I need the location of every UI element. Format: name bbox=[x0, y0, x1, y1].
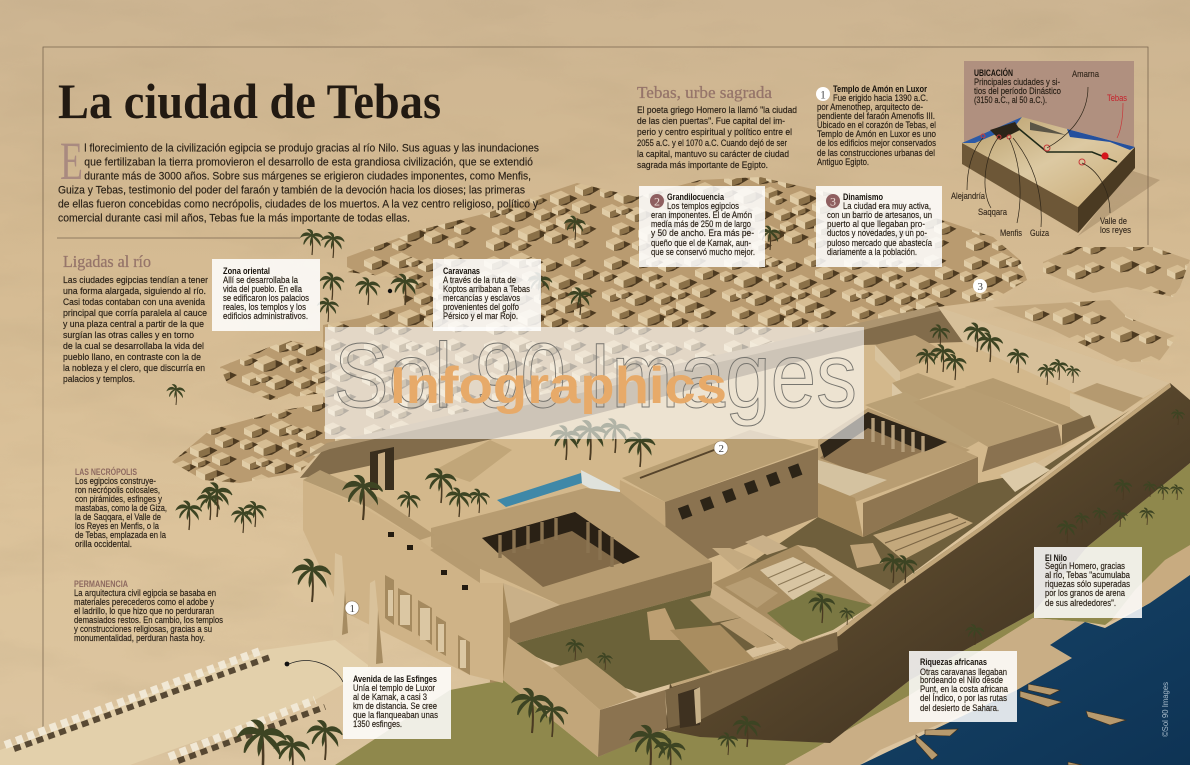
obelisks bbox=[333, 553, 383, 667]
callout: El Nilo: Según Homero, gracias bbox=[1045, 560, 1125, 571]
callout: Riquezas africanas: Punt, en la costa africana bbox=[920, 683, 1009, 694]
text block: Permanencia: demasiados restos. En cambio, los templos bbox=[74, 614, 223, 625]
temple of Amun bbox=[300, 305, 1190, 757]
callout: Dinamismo: ductos y novedades, y un po- bbox=[827, 227, 927, 238]
callout: Grandilocuencia bbox=[639, 186, 765, 267]
callout: Zona oriental: se edificaron los palacios bbox=[223, 292, 309, 303]
text block: Tebas, urbe sagrada bbox=[637, 104, 797, 170]
sphinx avenue bbox=[0, 640, 372, 765]
shed in north yard bbox=[435, 440, 512, 482]
callout: Grandilocuencia: y 50 de ancho. Era más pe- bbox=[651, 227, 754, 238]
boats bbox=[916, 684, 1126, 765]
text block: Tebas, urbe sagrada: la capital, mantuvo su carácter de ciudad bbox=[637, 148, 789, 159]
marker: number 1 on temple bbox=[345, 601, 359, 615]
intro text with drop cap bbox=[58, 131, 539, 224]
callout: Riquezas africanas: bordeando el Nilo desde bbox=[920, 674, 1003, 685]
callout: Zona oriental: edificios administrativos. bbox=[223, 310, 308, 321]
callout: Riquezas africanas: del desierto de Sahara. bbox=[920, 702, 999, 713]
callout: Grandilocuencia: eran imponentes. El de Amón bbox=[651, 209, 752, 220]
map panel bbox=[964, 61, 1134, 151]
text block: Ligadas al río bbox=[63, 274, 208, 384]
marker: number 3 on village bbox=[973, 279, 987, 293]
map labels bbox=[951, 69, 1131, 238]
east courtyard small roof bbox=[875, 335, 945, 372]
text block: Templo de Amón en Luxor: por Amenothep, arquitecto de- bbox=[817, 101, 923, 112]
map labels: Saqqara bbox=[978, 207, 1007, 217]
callout: Avenida de las Esfinges: que la flanqueaban unas bbox=[353, 709, 438, 720]
text block: Las necrópolis: los Reyes en Menfis, o la bbox=[75, 520, 160, 531]
callout: Grandilocuencia: queño que el de Karnak, aun- bbox=[651, 237, 751, 248]
callout: Dinamismo: puloso mercado que abastecía bbox=[827, 237, 933, 248]
callout: El Nilo: El Nilo bbox=[1045, 553, 1067, 563]
text block: Ligadas al río: pueblo llano, en contraste con la de bbox=[63, 351, 201, 362]
callout: Riquezas africanas: del Índico, o por las rutas bbox=[920, 692, 1007, 703]
map labels: Valle de bbox=[1100, 216, 1127, 226]
callout: Dinamismo bbox=[816, 186, 942, 267]
text block: Templo de Amón en Luxor: Antiguo Egipto. bbox=[817, 156, 869, 167]
text block: Ligadas al río: Las ciudades egipcias tendían a tener bbox=[63, 274, 208, 285]
intro text with drop cap: durante más de 3000 años. Sobre sus márgenes se erigieron ciudades imponentes, como Menfis, bbox=[84, 170, 531, 182]
map labels: Tebas bbox=[1107, 93, 1127, 103]
watermark: Sol 90 Images, Infographics: Sol 90 Images bbox=[334, 325, 857, 427]
east block with columned courtyard bbox=[818, 408, 978, 537]
marker: number 2 on temple: 2 bbox=[718, 443, 724, 455]
callout: Dinamismo: La ciudad era muy activa, bbox=[843, 200, 931, 211]
text block: Tebas, urbe sagrada: de las cien puertas". Fue capital del im- bbox=[637, 115, 785, 126]
text block: Ligadas al río: de la cual se desarrollaba la vida del bbox=[63, 340, 204, 351]
text block: Templo de Amón en Luxor: Templo de Amón en Luxor es uno bbox=[817, 128, 936, 139]
text block: Las necrópolis: mastabas, como la de Giza, bbox=[75, 502, 167, 513]
text block: Las necrópolis: con pirámides, esfinges y bbox=[75, 493, 162, 504]
text block: Tebas, urbe sagrada: 2055 a.C. y el 1070 a.C. Cuando dejó de ser bbox=[637, 137, 787, 148]
text block: Templo de Amón en Luxor: de las construcciones urbanas del bbox=[817, 147, 935, 158]
river Nile bbox=[860, 575, 1190, 765]
callout: Dinamismo: con un barrio de artesanos, un bbox=[827, 209, 932, 220]
text block: Ligadas al río: principal que corría paralela al cauce bbox=[63, 307, 207, 318]
outer south wall with shadow bbox=[665, 383, 1190, 743]
text block: Templo de Amón en Luxor: pendiente del faraón Amenofis III. bbox=[817, 110, 935, 121]
text block: Las necrópolis: de Tebas, emplazada en la bbox=[75, 529, 167, 540]
text block: Las necrópolis: orilla occidental. bbox=[75, 538, 132, 549]
callout: Grandilocuencia: Los templos egipcios bbox=[667, 200, 739, 211]
map labels: Amarna bbox=[1072, 69, 1099, 79]
callout: Caravanas: provenientes del golfo bbox=[443, 301, 519, 312]
heading: Ligadas al río: Ligadas al río bbox=[63, 252, 151, 271]
text block: Templo de Amón en Luxor: Templo de Amón en Luxor bbox=[833, 84, 927, 94]
callout: Riquezas africanas bbox=[909, 651, 1017, 722]
text block: Templo de Amón en Luxor: Fue erigido hacia 1390 a.C. bbox=[833, 92, 928, 103]
leader lines bbox=[967, 87, 1123, 227]
text block: Permanencia: PERMANENCIA bbox=[74, 579, 128, 589]
locator map: Ubicación bbox=[951, 61, 1160, 238]
locator map: Ubicación: Principales ciudades y si- bbox=[974, 76, 1060, 87]
map markers bbox=[981, 134, 1109, 165]
text block: Ligadas al río: una forma alargada, siguiendo al río. bbox=[63, 285, 206, 296]
temple ground bbox=[303, 307, 1170, 683]
quay bbox=[785, 618, 1085, 765]
village: east bank neighbourhoods bbox=[172, 177, 1190, 483]
text block: Las necrópolis: Los egipcios construye- bbox=[75, 475, 156, 486]
locator map: Ubicación: tios del período Dinástico bbox=[974, 85, 1061, 96]
intro text with drop cap: de ellas fueron concebidas como necrópolis, ciudades de los muertos. A la vez centro religioso, político y bbox=[58, 198, 539, 210]
callout: El Nilo: riquezas sólo superadas bbox=[1045, 578, 1130, 589]
text block: Las necrópolis: la de Saqqara, el Valle de bbox=[75, 511, 161, 522]
heading: Tebas, urbe sagrada: Tebas, urbe sagrada bbox=[637, 83, 772, 102]
text block: Permanencia: La arquitectura civil egipcia se basaba en bbox=[74, 587, 216, 598]
callout: Avenida de las Esfinges: Unía el templo de Luxor bbox=[353, 682, 435, 693]
3D terrain block bbox=[962, 117, 1160, 236]
intro text with drop cap: comercial durante casi mil años, Tebas fue la más importante de todas ellas. bbox=[58, 212, 410, 224]
title: La ciudad de Tebas bbox=[58, 73, 441, 129]
callout: Dinamismo: puerto al que llegaban pro- bbox=[827, 218, 925, 229]
gateway bbox=[370, 447, 394, 490]
green land along the river bbox=[335, 463, 1190, 765]
text block: Las necrópolis: LAS NECRÓPOLIS bbox=[75, 466, 137, 477]
locator map: Ubicación: (3150 a.C., al 50 a.C.). bbox=[974, 94, 1047, 105]
intro text with drop cap: Guiza y Tebas, testimonio del poder del faraón y también de la devoción hacia los dioses; las primeras bbox=[58, 184, 525, 196]
north-east pale wall bbox=[938, 307, 1170, 398]
callout: Riquezas africanas: Otras caravanas llegaban bbox=[920, 666, 1007, 677]
callout: El Nilo bbox=[1034, 547, 1142, 618]
intro text with drop cap: l florecimiento de la civilización egipcia se produjo gracias al río Nilo. Sus aguas y las inundaciones bbox=[84, 142, 539, 154]
locator map: Ubicación: UBICACIÓN bbox=[974, 67, 1013, 78]
callout: Grandilocuencia: Grandilocuencia bbox=[667, 192, 725, 202]
text block: Permanencia bbox=[74, 579, 223, 643]
text block: Las necrópolis bbox=[75, 466, 167, 549]
north enclosure wall bbox=[300, 307, 963, 478]
callout: Grandilocuencia: que se conservó mucho mejor. bbox=[651, 246, 755, 257]
callout: Avenida de las Esfinges: Avenida de las Esfinges bbox=[353, 674, 437, 684]
callout: El Nilo: al río, Tebas "acumulaba bbox=[1045, 569, 1131, 580]
text block: Permanencia: y construcciones religiosas, gracias a su bbox=[74, 623, 212, 634]
callout: Zona oriental bbox=[212, 259, 320, 331]
text block: Permanencia: monumentalidad, perduran hasta hoy. bbox=[74, 632, 205, 643]
text block: Templo de Amón en Luxor: de los edificios mejor conservados bbox=[817, 137, 936, 148]
callout: Zona oriental: vida del pueblo. En ella bbox=[223, 283, 303, 294]
statues and windows bbox=[385, 532, 470, 675]
text block: Tebas, urbe sagrada: perio y centro espiritual y político entre el bbox=[637, 126, 792, 137]
callout: Avenida de las Esfinges: 1350 esfinges. bbox=[353, 718, 402, 729]
marker: number 2 on temple bbox=[714, 441, 728, 455]
credit: ©Sol 90 Images bbox=[1160, 682, 1170, 737]
text block: Templo de Amón en Luxor: Ubicado en el corazón de Tebas, el bbox=[817, 119, 936, 130]
east roofs bbox=[865, 373, 1143, 472]
text block: Permanencia: el ladrillo, lo que hizo que no perduraran bbox=[74, 605, 214, 616]
callout: Riquezas africanas: Riquezas africanas bbox=[920, 657, 987, 667]
callout: Dinamismo: Dinamismo bbox=[843, 192, 883, 202]
callout: Dinamismo: diariamente a la población. bbox=[827, 246, 917, 257]
text block: Ligadas al río: y una plaza central a partir de la que bbox=[63, 318, 204, 329]
callout: El Nilo: de sus alrededores". bbox=[1045, 597, 1116, 608]
icon: number 1: 1 bbox=[820, 88, 826, 102]
map labels: Alejandría bbox=[951, 191, 985, 201]
map labels: Menfis bbox=[1000, 228, 1022, 238]
callout: Avenida de las Esfinges: km de distancia. Se cree bbox=[353, 700, 437, 711]
text block: Ligadas al río: la nobleza y el clero, que discurría en bbox=[63, 362, 205, 373]
south-west court bbox=[503, 590, 838, 757]
palm trees bbox=[167, 216, 1185, 765]
text block: Permanencia: materiales perecederos como el adobe y bbox=[74, 596, 214, 607]
callout: Avenida de las Esfinges: al de Karnak, a casi 3 bbox=[353, 691, 427, 702]
vaulted store rooms bbox=[647, 462, 1050, 672]
callout: Caravanas: Pérsico y el mar Rojo. bbox=[443, 310, 518, 321]
map labels: Guiza bbox=[1030, 228, 1049, 238]
callout: El Nilo: por los granos de arena bbox=[1045, 587, 1126, 598]
text block: Ligadas al río: surgían las otras calles y en torno bbox=[63, 329, 194, 340]
great building with windows bbox=[618, 430, 818, 575]
map labels: los reyes bbox=[1100, 225, 1131, 235]
text block: Tebas, urbe sagrada: sagrada más importante de Egipto. bbox=[637, 159, 768, 170]
leader dot: Zona oriental bbox=[388, 289, 392, 293]
text block: Templo de Amón en Luxor bbox=[816, 84, 936, 167]
callout: Caravanas: A través de la ruta de bbox=[443, 274, 516, 285]
sandy shore bbox=[1110, 545, 1190, 622]
text block: Ligadas al río: Casi todas contaban con una avenida bbox=[63, 296, 206, 307]
roof ring with columned court bbox=[431, 488, 712, 683]
marker: number 1 on temple: 1 bbox=[350, 603, 355, 615]
intro text with drop cap: E bbox=[60, 131, 83, 191]
front pylon wall bbox=[303, 470, 503, 683]
marker: number 3 on village: 3 bbox=[978, 281, 984, 293]
watermark: Sol 90 Images, Infographics: Infographics bbox=[390, 357, 727, 415]
callout: Avenida de las Esfinges bbox=[343, 667, 451, 739]
callout: Caravanas bbox=[433, 259, 541, 331]
callout: Caravanas: mercancías y esclavos bbox=[443, 292, 520, 303]
south yard floor bbox=[590, 410, 1130, 683]
callout: Caravanas: Caravanas bbox=[443, 266, 480, 276]
callout: Caravanas: Koptos arribaban a Tebas bbox=[443, 283, 530, 294]
callout: Zona oriental: Zona oriental bbox=[223, 266, 270, 276]
icon: number 3: 3 bbox=[830, 194, 836, 208]
callout: Grandilocuencia: medía más de 250 m de largo bbox=[651, 218, 751, 229]
callout: Zona oriental: reales, los templos y los bbox=[223, 301, 306, 312]
text block: Ligadas al río: palacios y templos. bbox=[63, 373, 135, 384]
text block: Las necrópolis: ron necrópolis colosales, bbox=[75, 484, 160, 495]
icon: number 2: 2 bbox=[654, 194, 660, 208]
callout: Zona oriental: Allí se desarrollaba la bbox=[223, 274, 299, 285]
pool bbox=[497, 470, 620, 507]
text block: Tebas, urbe sagrada: El poeta griego Homero la llamó "la ciudad bbox=[637, 104, 797, 115]
intro text with drop cap: que fertilizaban la tierra promovieron el desarrollo de esta grandiosa civilización, que se extendió bbox=[84, 156, 533, 168]
